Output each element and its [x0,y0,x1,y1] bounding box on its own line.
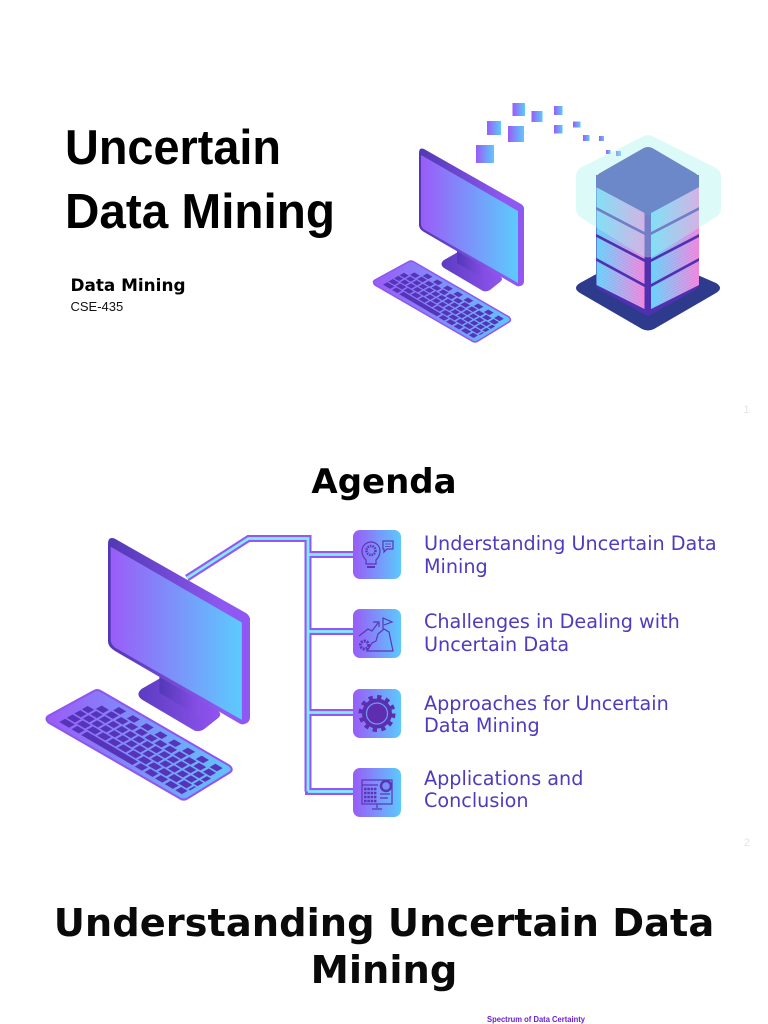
agenda item 4 [353,767,583,817]
keyboard [374,261,510,342]
illustration: computer [374,148,524,342]
server stripes [596,187,699,309]
title [65,121,335,239]
item text: Applications and [424,767,583,790]
icon: data squares [476,103,621,163]
course code: CSE-435 [70,299,123,314]
page number: 2 [744,837,750,849]
heading: understanding uncertain data mining: Mining [311,948,457,993]
chart caption: Spectrum of Data Certainty [487,1014,585,1024]
title: Uncertain [65,121,281,175]
item text: Data Mining [424,714,540,737]
icon: idea bulb [353,530,401,579]
heading: understanding uncertain data mining: Understanding Uncertain Data [54,901,714,946]
server body [596,175,699,316]
page number: 1 [744,404,750,416]
item text: Conclusion [424,789,529,812]
icon: mountain flag [353,609,401,658]
agenda item 3 [353,689,669,738]
agenda item 2 [353,609,680,658]
item text: Understanding Uncertain Data [424,532,717,555]
monitor stand [442,248,502,291]
icon: monitor settings [353,768,401,817]
heading: agenda: Agenda [311,462,457,502]
monitor [419,148,524,286]
agenda item 1 [353,530,717,579]
item text: Mining [424,555,488,578]
illustration: server [576,135,721,330]
subtitle: Data Mining [70,276,186,296]
illustration: agenda computer [46,538,250,800]
connector lines [187,538,353,792]
title: Data Mining [65,185,335,239]
server base [576,250,720,330]
item text: Approaches for Uncertain [424,692,669,715]
item text: Uncertain Data [424,633,569,656]
item text: Challenges in Dealing with [424,610,680,633]
icon: gear [353,689,401,738]
server top [596,147,699,218]
glow hexagon [576,135,721,258]
